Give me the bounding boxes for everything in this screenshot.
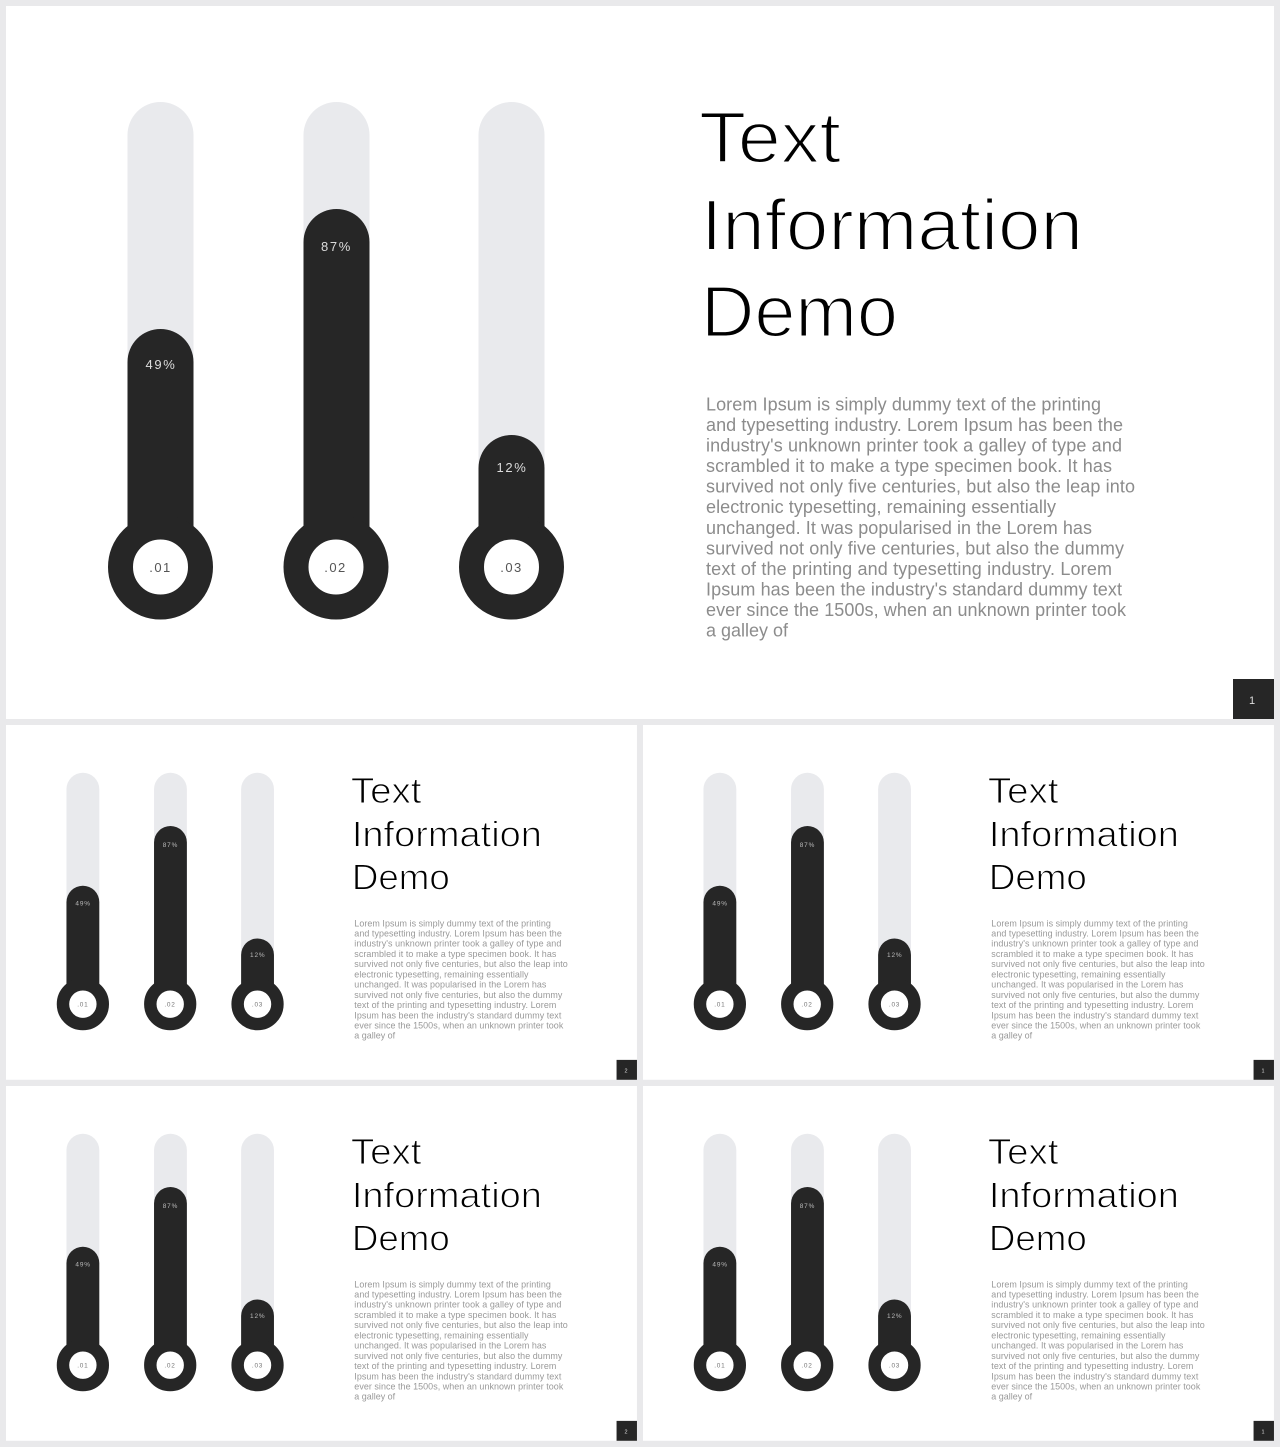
thermometer 03 — [238, 1134, 277, 1385]
page number — [617, 1060, 637, 1080]
thermometer 01, 49% — [120, 102, 200, 607]
thermometer 02: .02 — [801, 1363, 813, 1370]
body text: ever since the 1500s, when an unknown printer took — [354, 1021, 564, 1031]
title — [988, 771, 1179, 897]
thermometer 02: .02 — [164, 1002, 176, 1009]
body text: and typesetting industry. Lorem Ipsum has been the — [991, 1289, 1199, 1299]
body text — [354, 918, 568, 1041]
title: Information — [352, 1175, 542, 1215]
thermometer 01: .01 — [714, 1363, 725, 1370]
page number: 1 — [1249, 695, 1255, 707]
body text: scrambled it to make a type specimen book. It has — [354, 949, 557, 959]
body text: and typesetting industry. Lorem Ipsum has been the — [991, 928, 1199, 938]
body text: survived not only five centuries, but also the leap into — [706, 477, 1135, 497]
body text: unchanged. It was popularised in the Lorem has — [354, 980, 547, 990]
body text: survived not only five centuries, but also the dummy — [354, 1351, 563, 1361]
thermometer 01: 49% — [712, 901, 728, 908]
thermometer 02 — [150, 773, 190, 1024]
body text: survived not only five centuries, but also the leap into — [354, 959, 568, 969]
body text: Lorem Ipsum is simply dummy text of the printing — [354, 1279, 551, 1289]
page number — [1254, 1060, 1274, 1080]
thermometer 02: 87% — [163, 842, 178, 849]
body text: scrambled it to make a type specimen book. It has — [991, 949, 1194, 959]
body text: unchanged. It was popularised in the Lorem has — [991, 1341, 1184, 1351]
panel: slide 2 — [6, 725, 637, 1080]
body text: survived not only five centuries, but also the leap into — [991, 959, 1205, 969]
body text: and typesetting industry. Lorem Ipsum has been the — [354, 1289, 562, 1299]
body text: industry's unknown printer took a galley of type and — [991, 1300, 1198, 1310]
title — [988, 1132, 1179, 1258]
title — [699, 98, 1083, 352]
title: Demo — [352, 857, 450, 897]
thermometer 02, 87% — [296, 102, 376, 607]
title: Text — [351, 771, 422, 811]
body text: text of the printing and typesetting industry. Lorem — [991, 1000, 1193, 1010]
body text: electronic typesetting, remaining essentially — [354, 969, 529, 979]
title — [351, 771, 542, 897]
thermometer 01: .01 — [77, 1363, 88, 1370]
page number — [617, 1421, 637, 1441]
body text: ever since the 1500s, when an unknown printer took — [354, 1382, 564, 1392]
page number — [1233, 679, 1274, 719]
body text: ever since the 1500s, when an unknown printer took — [991, 1382, 1201, 1392]
thermometer 03: 12% — [887, 1313, 903, 1320]
title: Information — [989, 1175, 1179, 1215]
body text: and typesetting industry. Lorem Ipsum has been the — [354, 928, 562, 938]
body text: a galley of — [991, 1392, 1033, 1402]
thermometer 03 — [875, 1134, 914, 1385]
title: Text — [988, 1132, 1059, 1172]
body text: survived not only five centuries, but also the dummy — [991, 1351, 1200, 1361]
thermometer 02 — [150, 1134, 190, 1385]
thermometer 01: 49% — [75, 1262, 91, 1269]
thermometer 01 — [700, 773, 740, 1024]
title: Text — [988, 771, 1059, 811]
body text: industry's unknown printer took a galley of type and — [991, 939, 1198, 949]
body text: Lorem Ipsum is simply dummy text of the printing — [991, 1279, 1188, 1289]
body text: ever since the 1500s, when an unknown printer took — [706, 600, 1127, 620]
title: Text — [699, 98, 841, 178]
title: Demo — [352, 1218, 450, 1258]
thermometer 03, 12%: 12% — [496, 460, 528, 475]
thermometer 02: 87% — [800, 842, 815, 849]
panel: slide 5 — [643, 1086, 1274, 1441]
body text: survived not only five centuries, but also the leap into — [354, 1320, 568, 1330]
title: Demo — [989, 1218, 1087, 1258]
thermometer 03: 12% — [250, 1313, 266, 1320]
body text: and typesetting industry. Lorem Ipsum has been the — [706, 415, 1123, 435]
thermometer 03: .03 — [252, 1002, 263, 1009]
thermometer 02: .02 — [164, 1363, 176, 1370]
body text: text of the printing and typesetting industry. Lorem — [991, 1361, 1193, 1371]
thermometer 03: .03 — [889, 1363, 900, 1370]
title: Demo — [701, 272, 898, 352]
body text: a galley of — [354, 1392, 396, 1402]
body text: survived not only five centuries, but also the dummy — [354, 990, 563, 1000]
body text: electronic typesetting, remaining essentially — [354, 1330, 529, 1340]
body text: electronic typesetting, remaining essentially — [991, 969, 1166, 979]
body text: unchanged. It was popularised in the Lorem has — [991, 980, 1184, 990]
body text: electronic typesetting, remaining essentially — [991, 1330, 1166, 1340]
body text: scrambled it to make a type specimen book. It has — [354, 1310, 557, 1320]
thermometer 02: 87% — [163, 1203, 178, 1210]
thermometer 01, 49%: 49% — [145, 357, 177, 372]
panel: slide 4 — [6, 1086, 637, 1441]
body text: unchanged. It was popularised in the Lorem has — [354, 1341, 547, 1351]
thermometer 01 — [63, 773, 103, 1024]
thermometer 03: 12% — [250, 952, 266, 959]
body text: unchanged. It was popularised in the Lorem has — [706, 518, 1092, 538]
thermometer 03, 12%: .03 — [500, 560, 523, 575]
body text: Ipsum has been the industry's standard dummy text — [706, 579, 1122, 599]
body text: ever since the 1500s, when an unknown printer took — [991, 1021, 1201, 1031]
thermometer 01: .01 — [714, 1002, 725, 1009]
body text: text of the printing and typesetting industry. Lorem — [706, 559, 1112, 579]
thermometer 02: 87% — [800, 1203, 815, 1210]
body text: Lorem Ipsum is simply dummy text of the printing — [354, 918, 551, 928]
page number: 1 — [1261, 1429, 1265, 1435]
thermometer 01: .01 — [77, 1002, 88, 1009]
thermometer 02, 87%: 87% — [321, 239, 352, 254]
title: Information — [989, 814, 1179, 854]
thermometer 02 — [787, 1134, 827, 1385]
body text: Ipsum has been the industry's standard dummy text — [991, 1010, 1199, 1020]
thermometer 01 — [700, 1134, 740, 1385]
body text — [706, 394, 1135, 640]
body text: Ipsum has been the industry's standard dummy text — [354, 1371, 562, 1381]
thermometer 03: .03 — [889, 1002, 900, 1009]
page number: 2 — [624, 1068, 628, 1074]
page number — [1254, 1421, 1274, 1441]
body text: a galley of — [706, 620, 789, 640]
body text — [991, 1279, 1205, 1402]
title: Information — [701, 186, 1083, 266]
body text — [354, 1279, 568, 1402]
body text: a galley of — [991, 1031, 1033, 1041]
body text: industry's unknown printer took a galley of type and — [354, 939, 561, 949]
body text: electronic typesetting, remaining essentially — [706, 497, 1056, 517]
thermometer 01: 49% — [712, 1262, 728, 1269]
thermometer 02, 87%: .02 — [324, 560, 347, 575]
body text: text of the printing and typesetting industry. Lorem — [354, 1361, 556, 1371]
body text: Ipsum has been the industry's standard dummy text — [991, 1371, 1199, 1381]
title: Demo — [989, 857, 1087, 897]
body text: scrambled it to make a type specimen book. It has — [706, 456, 1112, 476]
body text: survived not only five centuries, but also the dummy — [991, 990, 1200, 1000]
thermometer 03, 12% — [472, 102, 552, 607]
thermometer 02: .02 — [801, 1002, 813, 1009]
title — [351, 1132, 542, 1258]
page number: 2 — [624, 1429, 628, 1435]
thermometer 03 — [875, 773, 914, 1024]
panel: slide 3 — [643, 725, 1274, 1080]
body text: industry's unknown printer took a galley of type and — [706, 436, 1122, 456]
body text: survived not only five centuries, but also the leap into — [991, 1320, 1205, 1330]
body text — [991, 918, 1205, 1041]
title: Text — [351, 1132, 422, 1172]
body text: text of the printing and typesetting industry. Lorem — [354, 1000, 556, 1010]
thermometer 01, 49%: .01 — [149, 560, 172, 575]
body text: scrambled it to make a type specimen book. It has — [991, 1310, 1194, 1320]
thermometer 02 — [787, 773, 827, 1024]
body text: industry's unknown printer took a galley of type and — [354, 1300, 561, 1310]
thermometer 03: 12% — [887, 952, 903, 959]
page number: 1 — [1261, 1068, 1265, 1074]
thermometer 03 — [238, 773, 277, 1024]
body text: survived not only five centuries, but also the dummy — [706, 538, 1124, 558]
body text: Ipsum has been the industry's standard dummy text — [354, 1010, 562, 1020]
thermometer 01 — [63, 1134, 103, 1385]
body text: Lorem Ipsum is simply dummy text of the printing — [706, 394, 1101, 414]
title: Information — [352, 814, 542, 854]
thermometer 03: .03 — [252, 1363, 263, 1370]
panel: main slide — [6, 6, 1274, 719]
body text: a galley of — [354, 1031, 396, 1041]
thermometer 01: 49% — [75, 901, 91, 908]
body text: Lorem Ipsum is simply dummy text of the printing — [991, 918, 1188, 928]
